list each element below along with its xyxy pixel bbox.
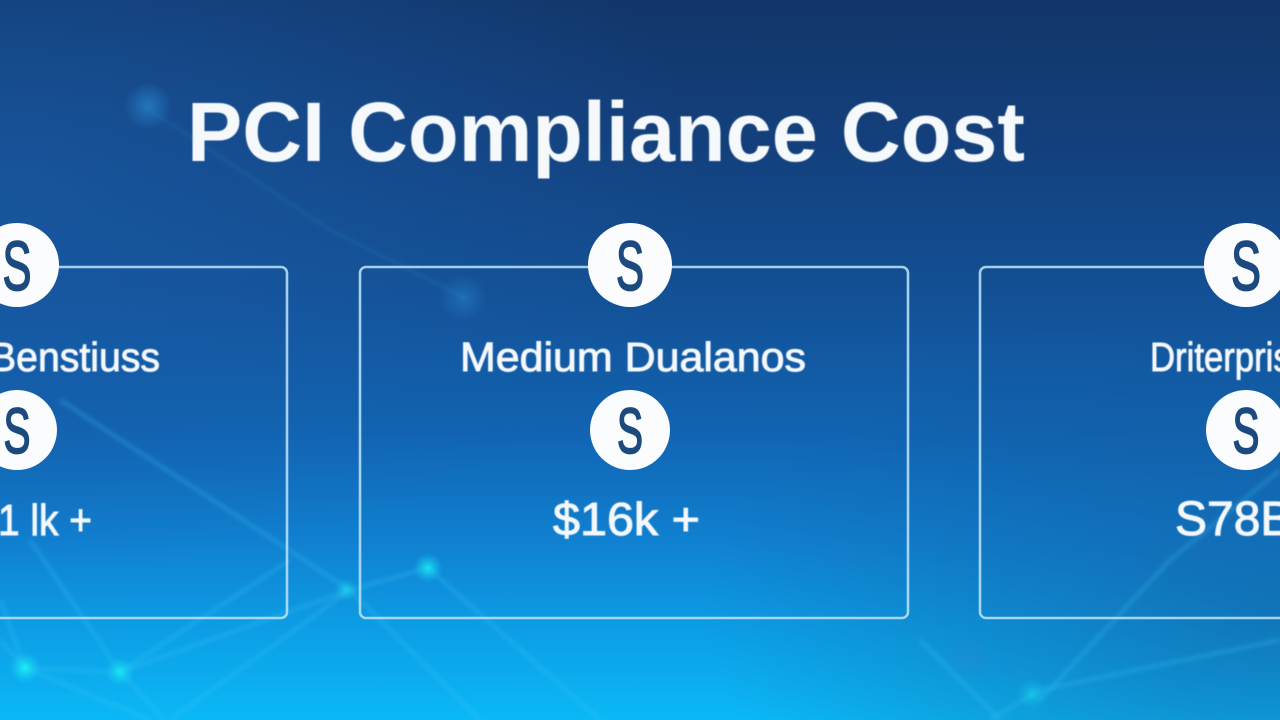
icon: dollar coin lower: S xyxy=(1232,395,1260,467)
icon: dollar coin lower xyxy=(1206,390,1280,470)
icon: dollar coin lower: S xyxy=(4,395,31,467)
panel outline xyxy=(360,267,908,618)
panel outline xyxy=(0,267,287,618)
price: $16k + xyxy=(553,493,700,545)
icon: dollar coin lower xyxy=(0,390,57,470)
icon: dollar coin top: S xyxy=(1231,227,1261,305)
background network nodes xyxy=(9,82,1048,710)
icon: dollar coin top: S xyxy=(616,227,644,305)
panel: medium business xyxy=(360,223,908,618)
panel outline xyxy=(980,267,1280,618)
title: PCI Compliance Cost xyxy=(187,85,1025,179)
icon: dollar coin lower xyxy=(590,390,670,470)
icon: dollar coin top: S xyxy=(2,227,32,305)
tier name: Medium Dualanos xyxy=(460,334,806,380)
icon: dollar coin lower: S xyxy=(617,395,643,467)
icon: dollar coin top xyxy=(1204,223,1280,307)
icon: dollar coin top xyxy=(588,223,672,307)
panel: small business xyxy=(0,223,287,618)
price: 1 lk + xyxy=(0,496,92,545)
panel: enterprise xyxy=(980,223,1280,618)
